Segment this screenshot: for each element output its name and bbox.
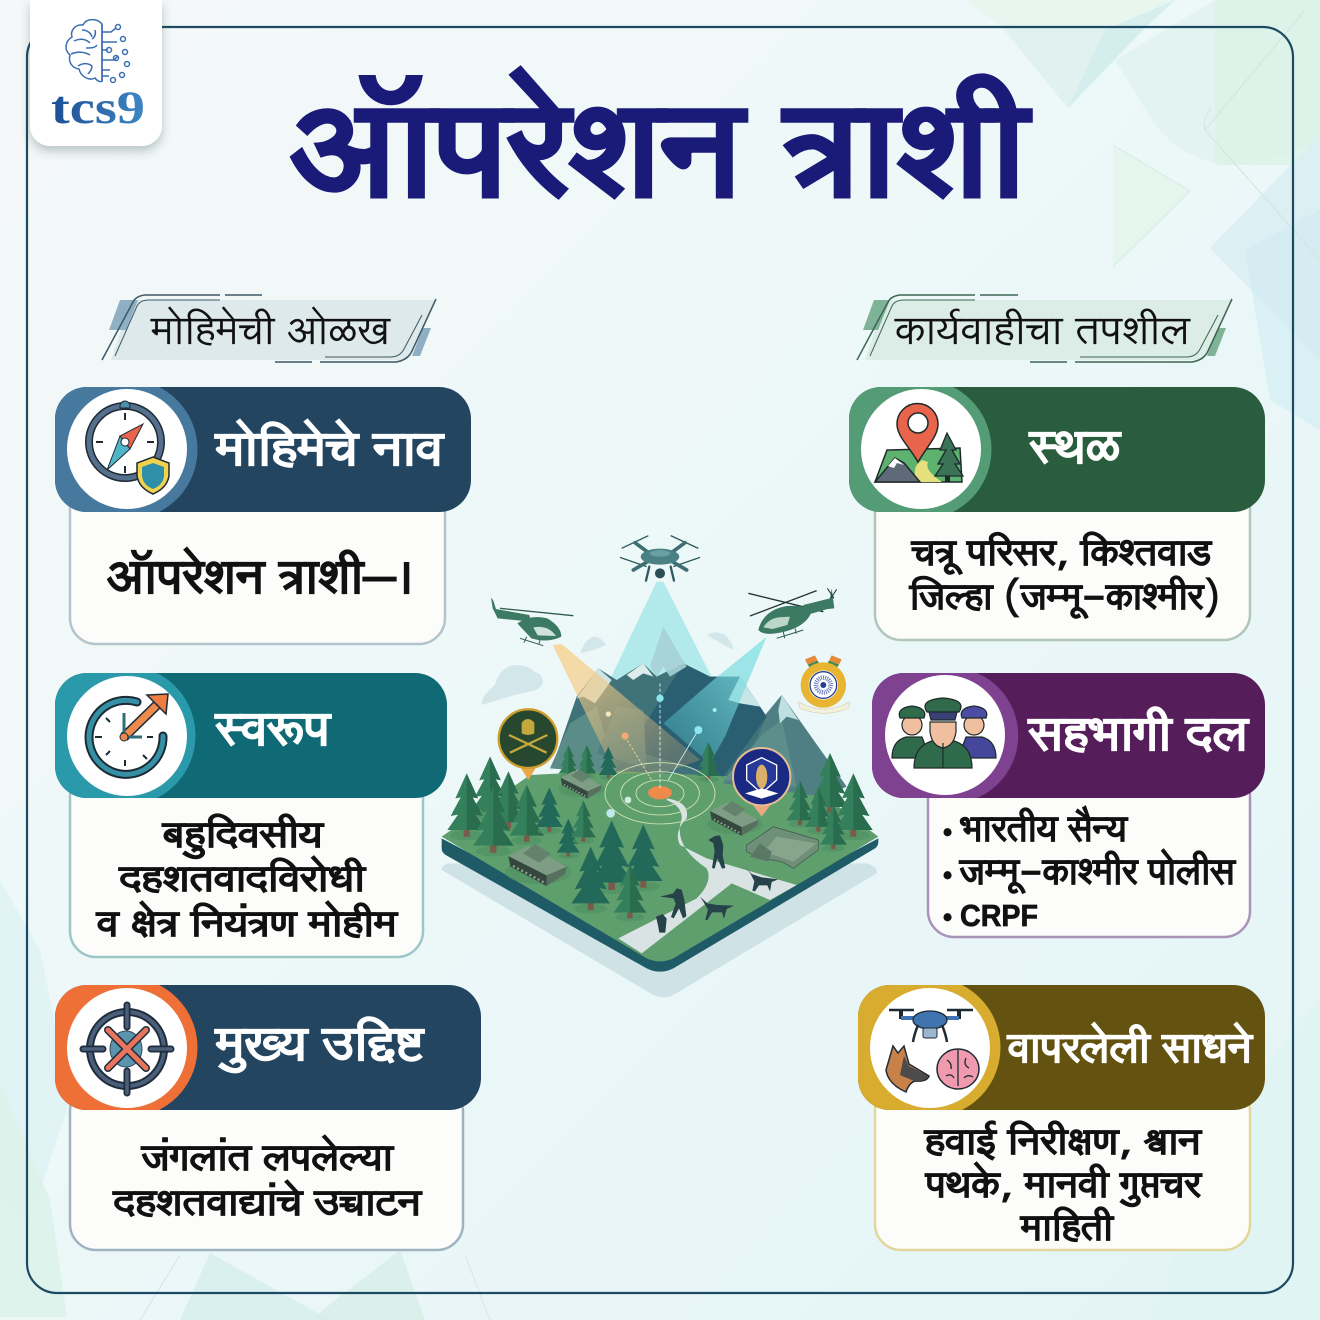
panel: participating forces: •	[943, 817, 952, 847]
panel: location: स्थळ	[1028, 414, 1122, 487]
cyan helicopter beam	[663, 637, 767, 763]
target links	[625, 683, 698, 790]
panel: mission name: ऑपरेशन त्राशी–।	[107, 544, 413, 617]
ground	[442, 768, 878, 961]
panel: location: चत्रू परिसर, किश्तवाड	[911, 527, 1213, 583]
road	[618, 798, 797, 953]
logo badge	[30, 0, 162, 146]
panel: main objective: मुख्य उद्दिष्ट	[214, 1011, 425, 1084]
panel: nature: दहशतवादविरोधी	[118, 853, 367, 909]
panel: participating forces: CRPF	[960, 898, 1038, 933]
mountains	[550, 627, 847, 797]
logo wordmark: tcs9	[51, 82, 145, 134]
right helicopter	[748, 588, 837, 638]
icon: map pin with mountain and tree	[875, 404, 963, 482]
panel: main objective: जंगलांत लपलेल्या	[141, 1132, 395, 1188]
panel: tools used: पथके, मानवी गुप्तचर	[925, 1159, 1202, 1215]
panel: location: जिल्हा (जम्मू-काश्मीर)	[909, 571, 1220, 627]
section heading: right: कार्यवाहीचा तपशील	[894, 303, 1191, 364]
panel: participating forces: •	[943, 860, 952, 890]
panel: main objective	[55, 985, 481, 1250]
forest	[447, 753, 873, 921]
icon: clock with arrow	[89, 694, 168, 774]
panel: nature: बहुदिवसीय	[162, 809, 325, 865]
crpf emblem	[798, 655, 850, 713]
icon: target cross	[83, 1005, 171, 1093]
central isometric map illustration	[442, 536, 878, 997]
panel: mission name: मोहिमेचे नाव	[214, 416, 445, 489]
panel: mission name	[55, 387, 471, 644]
platform shadow	[442, 863, 877, 997]
radar rings	[605, 763, 715, 824]
vehicles	[505, 769, 818, 886]
section heading: right	[857, 295, 1232, 364]
panel: tools used: माहिती	[1020, 1202, 1115, 1258]
yellow helicopter beam	[553, 644, 700, 773]
clouds	[482, 665, 543, 705]
panel: participating forces	[872, 673, 1265, 937]
panel: participating forces: जम्मू-काश्मीर पोलीस	[959, 846, 1237, 902]
title: ऑपरेशन त्राशी	[291, 56, 1031, 260]
left helicopter	[491, 597, 573, 646]
section heading: left: मोहिमेची ओळख	[150, 303, 391, 364]
panel: tools used	[858, 985, 1265, 1258]
panel: tools used: हवाई निरीक्षण, श्वान	[924, 1116, 1203, 1172]
panel: nature: व क्षेत्र नियंत्रण मोहीम	[96, 898, 398, 954]
panel: nature	[55, 673, 447, 957]
icon: three soldiers	[892, 698, 996, 768]
icon: compass with shield	[89, 401, 169, 494]
army emblem	[499, 709, 557, 780]
section heading: left	[102, 295, 436, 364]
panel: main objective: दहशतवाद्यांचे उच्चाटन	[112, 1177, 423, 1233]
panel: participating forces: भारतीय सैन्य	[960, 803, 1129, 859]
soldiers and dogs	[656, 835, 778, 933]
icon: drone, dog and brain	[886, 1010, 979, 1092]
icon: circuit brain	[66, 20, 130, 82]
panel: participating forces: सहभागी दल	[1027, 701, 1249, 774]
drone	[620, 536, 700, 581]
panel: nature: स्वरूप	[214, 696, 332, 769]
police emblem	[733, 748, 790, 817]
panel: location	[849, 387, 1265, 640]
panel: tools used: वापरलेली साधने	[1006, 1019, 1254, 1083]
platform side	[442, 838, 878, 972]
distant tree line	[559, 742, 720, 782]
panel: participating forces: •	[943, 902, 952, 932]
drone beam	[603, 582, 720, 693]
